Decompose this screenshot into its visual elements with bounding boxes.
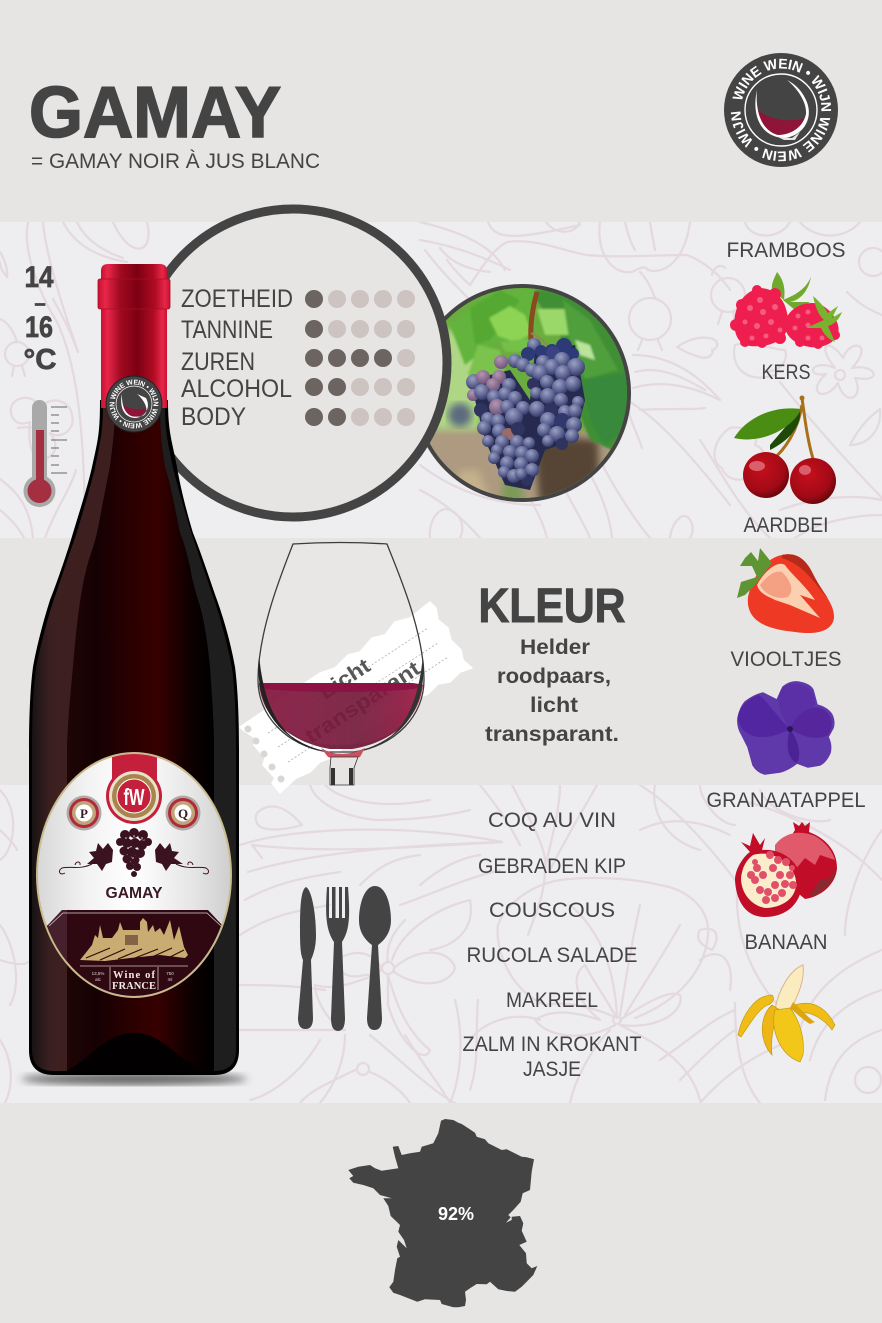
note paper: Licht — [315, 654, 375, 704]
label footer: 13,5% — [92, 971, 104, 976]
label footer: ml — [168, 977, 172, 982]
label: granaatappel: GRANAATAPPEL — [706, 789, 866, 812]
panel: food band — [0, 785, 882, 1103]
text: food pairings: JASJE — [523, 1058, 581, 1081]
label footer — [80, 966, 188, 992]
note paper: transparant — [301, 657, 424, 748]
text: food pairings: MAKREEL — [506, 989, 598, 1012]
panel: tasting circle — [139, 209, 447, 517]
bottle right strip — [160, 405, 236, 1071]
wine bottle — [28, 264, 239, 1075]
tasting dots — [305, 290, 415, 426]
text: food pairings: COQ AU VIN — [488, 809, 616, 832]
tasting labels: ZUREN — [181, 348, 255, 376]
temperature: 14 — [24, 261, 54, 294]
note paper — [240, 602, 472, 793]
tasting labels: ALCOHOL — [181, 375, 292, 403]
grape clusters — [466, 338, 585, 490]
label: framboos: FRAMBOOS — [726, 239, 846, 262]
label: banaan: BANAAN — [744, 931, 828, 954]
bottle wine body — [67, 405, 214, 1071]
label badge P: P — [80, 806, 88, 821]
temperature: 16 — [25, 311, 53, 344]
text: kleur description — [485, 636, 619, 746]
icon: pomegranate — [735, 822, 837, 917]
label badge Q: Q — [178, 806, 188, 821]
tasting labels: ZOETHEID — [181, 285, 293, 313]
panel: map band — [0, 1103, 882, 1323]
bottle shadow — [21, 1073, 247, 1085]
bottle capsule — [98, 264, 170, 408]
label footer: alc — [95, 977, 102, 982]
icon: thermometer — [24, 400, 67, 507]
text: kleur description: roodpaars, — [497, 665, 611, 688]
text: food pairings: COUSCOUS — [489, 899, 615, 922]
tasting labels — [181, 285, 293, 431]
icon: strawberry — [737, 548, 834, 633]
subtitle: = GAMAY NOIR À JUS BLANC — [31, 150, 320, 173]
label village engraving — [80, 918, 188, 961]
tasting labels: BODY — [181, 403, 246, 431]
label variety name: GAMAY — [106, 885, 163, 902]
label: kers: KERS — [762, 361, 810, 384]
text: kleur description: transparant. — [485, 723, 619, 746]
icon: raspberry — [730, 272, 842, 349]
label badge P — [66, 796, 102, 830]
icon: violet flower — [738, 682, 834, 774]
label: viooltjes: VIOOLTJES — [730, 648, 842, 671]
label footer: FRANCE — [112, 981, 156, 992]
label footer: 750 — [166, 971, 174, 976]
text: food pairings — [462, 809, 642, 1081]
wine glass — [255, 542, 428, 785]
label: aardbei: AARDBEI — [744, 514, 828, 537]
panel: tasting band — [0, 222, 882, 538]
label badge Q — [166, 796, 200, 830]
logo: wine wein wijn: WINE WEIN • WIJN WINE WEIN • WIJN — [730, 58, 832, 162]
bottle left highlight — [32, 405, 115, 1071]
wine — [259, 683, 423, 749]
map of France — [348, 1119, 537, 1307]
icon: banana — [738, 965, 835, 1062]
heading: kleur: KLEUR — [478, 580, 626, 633]
label footer: Wine of — [113, 970, 156, 981]
label medallion — [106, 768, 162, 824]
temperature: – — [34, 293, 46, 315]
label grape emblem — [59, 828, 209, 877]
temperature — [24, 261, 57, 376]
panel: colour band — [0, 538, 882, 785]
tasting labels: TANNINE — [181, 316, 273, 344]
map percentage: 92% — [438, 1204, 474, 1224]
text: food pairings: RUCOLA SALADE — [466, 944, 638, 967]
temperature: °C — [24, 344, 57, 376]
photo: grape bunch — [427, 284, 631, 502]
bottle label — [30, 752, 240, 1000]
text: kleur description: Helder — [520, 636, 590, 659]
icon: cutlery — [298, 886, 391, 1031]
text: food pairings: ZALM IN KROKANT — [462, 1033, 642, 1056]
icon: cherries — [734, 396, 836, 504]
title: GAMAY — [29, 73, 281, 153]
label medallion: fW — [124, 784, 145, 810]
text: kleur description: licht — [530, 694, 578, 717]
text: food pairings: GEBRADEN KIP — [478, 855, 626, 878]
neck sticker: WINE WEIN • WIJN WINE WEIN • WIJN — [110, 380, 158, 428]
